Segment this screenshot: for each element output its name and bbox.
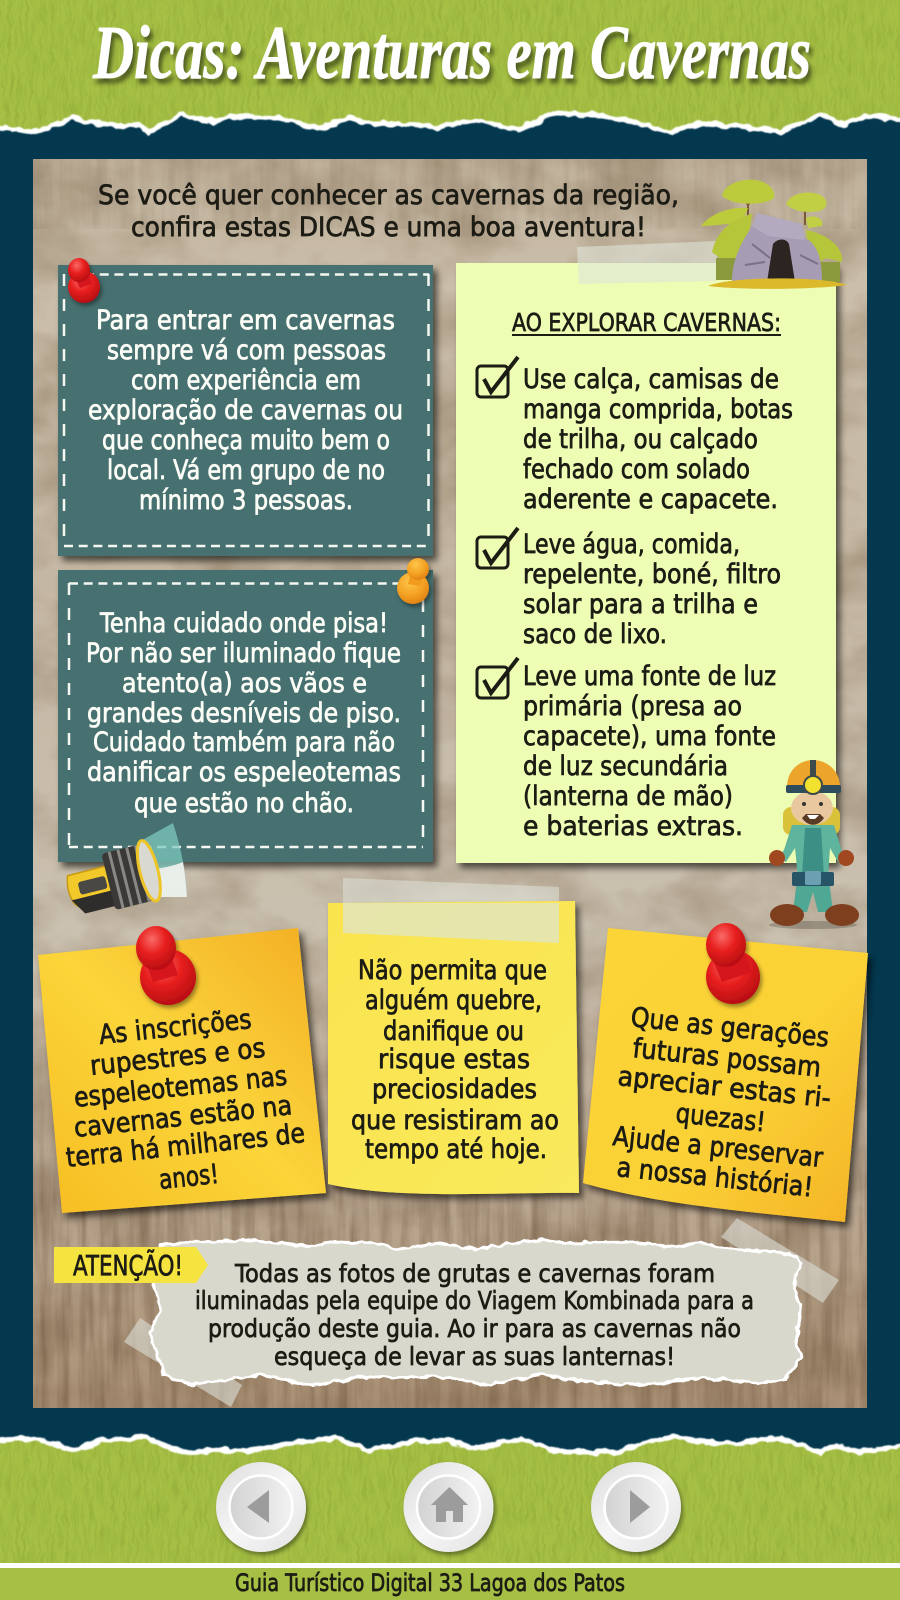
button: home bbox=[404, 1462, 494, 1552]
list item 1: manga comprida, botas bbox=[523, 394, 793, 425]
footer band bbox=[0, 1437, 900, 1600]
panel: textured board bbox=[33, 159, 867, 1408]
callout: atenção tag: ATENÇÃO! bbox=[73, 1249, 183, 1282]
text: attention note: esqueça de levar as suas lanternas! bbox=[274, 1342, 675, 1371]
icon: miner character bbox=[769, 760, 859, 929]
icon: checkbox 3 bbox=[477, 658, 518, 698]
list item 3: (lanterna de mão) bbox=[523, 781, 733, 812]
text: left note: terra há milhares de bbox=[64, 1118, 306, 1174]
tape on middle note, rear part bbox=[343, 878, 559, 943]
list item 1: fechado com solado bbox=[523, 454, 750, 485]
text: right note: a nossa história! bbox=[615, 1152, 814, 1204]
list item 1: de trilha, ou calçado bbox=[523, 424, 758, 455]
text: attention note: produção deste guia. Ao ir para as cavernas não bbox=[208, 1314, 741, 1343]
text: right note: Que as gerações bbox=[629, 1002, 830, 1054]
text: tip 2: que estão no chão. bbox=[134, 788, 354, 819]
icon: big red pin right bbox=[706, 923, 760, 1004]
text: left note: espeleotemas nas bbox=[72, 1061, 289, 1114]
list item 3: de luz secundária bbox=[523, 751, 728, 782]
list item 3: capacete), uma fonte bbox=[523, 721, 776, 752]
header band bbox=[0, 0, 900, 132]
intro text: confira estas DICAS e uma boa aventura! bbox=[131, 212, 646, 243]
text: tip 2: Cuidado também para não bbox=[93, 727, 395, 758]
text: middle note: danifique ou bbox=[383, 1016, 524, 1047]
intro text: Se você quer conhecer as cavernas da região, bbox=[98, 180, 679, 211]
text: middle note: tempo até hoje. bbox=[365, 1134, 547, 1165]
icon: small red pin bbox=[68, 258, 100, 303]
panel: teal tip 1 bbox=[58, 258, 433, 556]
icon: orange pin bbox=[397, 558, 429, 604]
icon: checkbox 1 bbox=[477, 357, 518, 397]
text: middle note: risque estas bbox=[378, 1044, 530, 1075]
text: left note: cavernas estão na bbox=[72, 1090, 294, 1144]
list item 1: Use calça, camisas de bbox=[523, 364, 779, 395]
text: tip 2: Por não ser iluminado fique bbox=[86, 638, 401, 669]
list item 3: primária (presa ao bbox=[523, 691, 742, 722]
icon: flashlight bbox=[61, 823, 187, 921]
text: attention note bbox=[195, 1259, 754, 1371]
tape on checklist bbox=[577, 241, 717, 284]
button: next bbox=[591, 1462, 681, 1552]
list item 2: Leve água, comida, bbox=[523, 529, 740, 560]
text: middle note: alguém quebre, bbox=[365, 985, 542, 1016]
text: attention note: iluminadas pela equipe do Viagem Kombinada para a bbox=[195, 1286, 754, 1315]
panel: yellow note middle bbox=[328, 901, 579, 1194]
text: left note: anos! bbox=[157, 1159, 220, 1196]
icon: cave with trees bbox=[701, 180, 847, 289]
list item 2: saco de lixo. bbox=[523, 619, 667, 650]
text: right note: quezas! bbox=[674, 1098, 767, 1138]
text: middle note: preciosidades bbox=[372, 1074, 537, 1105]
icon: big red pin left bbox=[136, 926, 196, 1005]
footer text: Guia Turístico Digital 33 Lagoa dos Patos bbox=[235, 1569, 625, 1597]
text: left note: As inscrições bbox=[97, 1004, 253, 1051]
panel: attention torn paper bbox=[124, 1218, 839, 1407]
text: tip 1: Para entrar em cavernas bbox=[96, 305, 395, 336]
text: right note bbox=[611, 1002, 832, 1204]
panel: orange note right bbox=[583, 923, 868, 1222]
text: right note: Ajude a preservar bbox=[611, 1121, 825, 1174]
panel: orange note left bbox=[38, 926, 326, 1213]
text: tip 2: Tenha cuidado onde pisa! bbox=[99, 608, 388, 639]
list item 3: e baterias extras. bbox=[523, 811, 743, 842]
text: tip 1: sempre vá com pessoas bbox=[107, 335, 386, 366]
list item 3: Leve uma fonte de luz bbox=[523, 661, 776, 692]
text: tip 1: que conheça muito bem o bbox=[102, 425, 390, 456]
text: left note bbox=[64, 1004, 306, 1196]
text: middle note: que resistiram ao bbox=[351, 1105, 559, 1136]
list item 3 bbox=[477, 658, 776, 842]
list item 2: solar para a trilha e bbox=[523, 589, 758, 620]
text: tip 2: danificar os espeleotemas bbox=[87, 757, 401, 788]
panel: checklist note bbox=[456, 263, 836, 863]
heading: ao explorar cavernas: AO EXPLORAR CAVERNAS: bbox=[512, 308, 781, 337]
panel: teal tip 2 bbox=[58, 558, 433, 862]
list item 2: repelente, boné, filtro bbox=[523, 559, 781, 590]
text: tip 1: mínimo 3 pessoas. bbox=[139, 485, 353, 516]
text: tip 2 bbox=[86, 608, 401, 819]
text: middle note: Não permita que bbox=[358, 955, 547, 986]
text: attention note: Todas as fotos de grutas e cavernas foram bbox=[234, 1259, 715, 1288]
text: tip 2: atento(a) aos vãos e bbox=[122, 668, 367, 699]
text: tip 1: local. Vá em grupo de no bbox=[107, 455, 385, 486]
text: tip 1: com experiência em bbox=[131, 365, 361, 396]
text: tip 1: exploração de cavernas ou bbox=[88, 395, 403, 426]
button: previous bbox=[216, 1462, 306, 1552]
list item 1 bbox=[477, 357, 793, 515]
text: tip 1 bbox=[88, 305, 403, 516]
list item 2 bbox=[477, 528, 781, 650]
text: middle note bbox=[351, 955, 559, 1165]
icon: checkbox 2 bbox=[477, 528, 518, 568]
intro text bbox=[98, 180, 679, 243]
text: left note: rupestres e os bbox=[88, 1033, 267, 1082]
text: right note: apreciar estas ri- bbox=[616, 1061, 832, 1114]
text: right note: futuras possam bbox=[631, 1033, 822, 1084]
text: tip 2: grandes desníveis de piso. bbox=[87, 698, 401, 729]
list item 1: aderente e capacete. bbox=[523, 484, 778, 515]
